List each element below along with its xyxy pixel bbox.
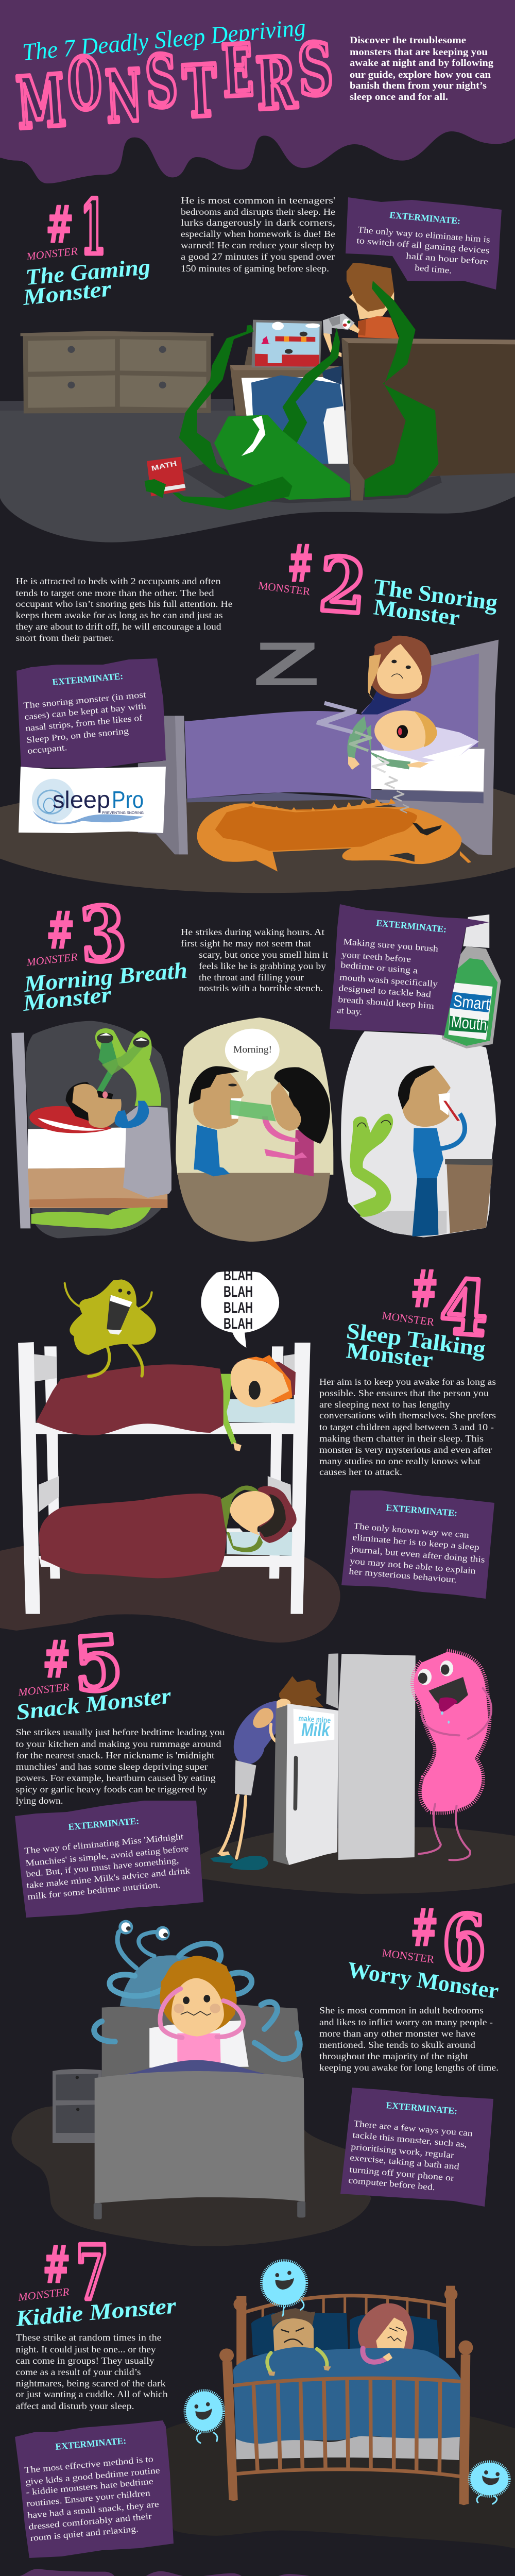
- callout: exterminate 2: [16, 658, 166, 768]
- text block: monster 7: [16, 2332, 168, 2411]
- bunk frame: [18, 1342, 311, 1614]
- callout panel: [340, 2088, 493, 2207]
- callout text: you may not be able to explain: [350, 1556, 476, 1576]
- text block: monster 4: [319, 1377, 496, 1477]
- callout text: - kiddie monsters hate bedtime: [26, 2476, 153, 2497]
- milk sticker: make mine: make mine: [298, 1714, 331, 1725]
- footboard: [341, 338, 515, 501]
- callout panel: [346, 197, 502, 290]
- text block: monster 4: many studies no one really knows what: [319, 1456, 480, 1466]
- logo card: [19, 767, 166, 833]
- speech text: [224, 1267, 253, 1332]
- text block: monster 2: tends to target one more than the other. The bed: [16, 588, 214, 598]
- mouthwash bottle: [442, 914, 501, 1048]
- man: [194, 1125, 220, 1171]
- text block: monster 7: nightmares, being scared of the dark: [16, 2378, 166, 2388]
- sleepPro logo card: [19, 767, 166, 833]
- panel: monster 4 illustration: [0, 1342, 340, 1642]
- text block: monster 5: powers. For example, heartburn caused by eating: [16, 1773, 216, 1783]
- lower blanket: [39, 1494, 227, 1578]
- floor: [11, 2106, 371, 2246]
- woman: [294, 1130, 314, 1176]
- callout text: The way of eliminating Miss 'Midnight: [24, 1832, 184, 1856]
- floor: [200, 1827, 515, 1894]
- monster label: MONSTER: [25, 245, 78, 263]
- numeral 4: 4: [438, 1263, 491, 1353]
- panel: monster 1 illustration: [0, 263, 515, 543]
- intro text: sleep once and for all.: [350, 92, 448, 103]
- snore letters: Z: [398, 802, 411, 816]
- desk: [230, 347, 341, 416]
- text block: monster 3: [181, 927, 328, 993]
- intro text: [350, 35, 494, 103]
- boy gaming: [323, 263, 399, 357]
- callout text: give kids a good bedtime routine: [25, 2465, 160, 2487]
- text block: monster 1: warned! He can reduce your sleep by: [181, 240, 335, 250]
- text block: monster 2: occupant who isn’t snoring gets his full attention. He: [16, 599, 233, 609]
- pink fuzzy monster: [414, 1652, 491, 1860]
- callout heading: EXTERMINATE:: [386, 2100, 458, 2116]
- callout panel: [15, 1801, 203, 1918]
- top blanket: [36, 1364, 224, 1435]
- name: Snack Monster: [15, 1683, 173, 1725]
- breath monsters: [95, 1028, 161, 1106]
- callout heading: EXTERMINATE:: [52, 671, 124, 687]
- heading: monster 3: [21, 889, 188, 1016]
- text block: monster 5: to your kitchen and making you rummage around: [16, 1739, 221, 1749]
- callout text: take make mine Milk's advice and drink: [26, 1866, 191, 1890]
- snore letters: Z: [312, 692, 363, 742]
- text block: monster 4: monster is very mysterious and even after: [319, 1445, 492, 1455]
- text block: monster 2: keeps them awake for as long as he can and just as: [16, 610, 223, 620]
- callout: exterminate 7: [15, 2420, 174, 2558]
- top bunk child: [219, 1355, 296, 1451]
- text block: monster 4: making them chatter in their sleep. This: [319, 1433, 484, 1444]
- heading: monster 5: [15, 1619, 173, 1725]
- text block: monster 5: [16, 1727, 225, 1806]
- callout heading: EXTERMINATE:: [389, 210, 461, 226]
- callout text: There are a few ways you can: [353, 2119, 473, 2138]
- sleeping man head: [66, 1082, 98, 1122]
- math book: [145, 457, 185, 498]
- text block: monster 3: the throat and filling your: [199, 972, 304, 982]
- worry creature: [94, 1920, 300, 2059]
- hash sign: #: [410, 1899, 438, 1958]
- callout text: to switch off all gaming devices: [356, 235, 490, 256]
- logo strapline: PREVENTING SNORING: [102, 810, 144, 815]
- callout text: breath should keep him: [338, 994, 435, 1011]
- heading: monster 1: 1: [80, 184, 106, 272]
- intro text: banish them from your night’s: [350, 80, 487, 91]
- title word: MONSTERS: R: [254, 40, 299, 126]
- speech text: Morning!: [233, 1044, 272, 1055]
- dresser: [21, 331, 214, 413]
- orange monster: [197, 799, 471, 872]
- heading: monster 1: [21, 184, 151, 310]
- milk sticker: milk: Milk: [301, 1719, 331, 1740]
- headboard: [102, 2003, 304, 2087]
- book title: MATH: [150, 459, 178, 472]
- bunk mattresses: [227, 1399, 295, 1423]
- gaming monster: [173, 281, 438, 510]
- callout text: bedtime or using a: [340, 960, 418, 976]
- text block: monster 3: first sight he may not seem that: [181, 938, 311, 948]
- mattress strip: [236, 2436, 460, 2460]
- title word: MONSTERS: S: [143, 39, 180, 124]
- text block: monster 7: These strike at random times in the: [16, 2332, 162, 2343]
- bottle brand: Mouth: Mouth: [450, 1012, 488, 1034]
- text block: monster 7: can come in groups! They usually: [16, 2355, 154, 2366]
- callout text: The snoring monster (in most: [23, 689, 147, 710]
- floor: [164, 2415, 515, 2549]
- heading: monster 6: [346, 1899, 501, 2004]
- text block: monster 2: He is attracted to beds with 2 occupants and often: [16, 576, 221, 586]
- hash sign: #: [287, 534, 314, 594]
- callout text: Munchies' is simple, avoid eating before: [25, 1843, 189, 1868]
- monster label: MONSTER: [381, 1309, 435, 1328]
- small bed: [242, 366, 348, 464]
- fridge body: [326, 1653, 416, 1860]
- monster label: MONSTER: [17, 2285, 70, 2303]
- floor: [0, 1546, 340, 1642]
- callout text: designed to tackle bad: [338, 983, 432, 999]
- footboard: [219, 2341, 473, 2505]
- intro text: Discover the troublesome: [350, 35, 466, 46]
- name line 2: Monster: [21, 981, 113, 1016]
- callout text: prioritising work, regular: [351, 2142, 455, 2160]
- kiddie monster right: [470, 2463, 508, 2504]
- callout text: dressed comfortably and their: [28, 2511, 152, 2532]
- text block: monster 6: keeping you awake for long lengths of time.: [319, 2062, 499, 2073]
- text block: monster 5: for the nearest snack. Her nickname is 'midnight: [16, 1750, 215, 1760]
- logo wordmark: sleep: [53, 786, 110, 813]
- text block: monster 2: they are about to drift off, he will encourage a loud: [16, 621, 221, 632]
- monster label: MONSTER: [17, 1681, 70, 1699]
- panel: monster 5 illustration: [200, 1652, 515, 1894]
- text block: monster 2: snort from their partner.: [16, 633, 114, 643]
- callout text: [23, 689, 147, 756]
- callout text: routines. Ensure your children: [26, 2488, 151, 2509]
- callout text: occupant.: [27, 742, 67, 756]
- panel: monster 3 illustrations: [11, 914, 501, 1242]
- hash sign: #: [46, 195, 74, 255]
- text block: monster 1: [181, 195, 335, 274]
- text block: monster 1: He is most common in teenagers': [181, 195, 335, 206]
- kiddie monster left: [186, 2392, 222, 2443]
- callout text: cases) can be kept at bay with: [24, 701, 147, 722]
- text block: monster 5: munchies' and has some sleep depriving super: [16, 1761, 208, 1772]
- name line 1: The Gaming: [25, 254, 151, 290]
- callout text: bed time.: [415, 263, 452, 276]
- scene: sleeping man: [11, 1021, 171, 1238]
- title word: MONSTERS: E: [220, 28, 255, 113]
- scene: morning breath couple: [176, 1018, 333, 1242]
- callout heading: EXTERMINATE:: [386, 1502, 458, 1518]
- snore letters: Z: [253, 630, 320, 699]
- callout: exterminate 6: [340, 2088, 493, 2207]
- callout text: room is quiet and relaxing.: [30, 2524, 139, 2543]
- callout panel: [16, 658, 166, 768]
- callout text: eliminate her is to keep a sleep: [352, 1532, 479, 1552]
- text block: monster 4: possible. She ensures that the person you: [319, 1388, 489, 1398]
- name line 2: Monster: [372, 594, 461, 631]
- scene: toothbrushing: [341, 1031, 496, 1238]
- title word: MONSTERS: T: [181, 48, 219, 134]
- panel: monster 7 illustration: [164, 2286, 515, 2549]
- panel: sleep talking monster: [65, 1271, 279, 1377]
- floor: [0, 411, 515, 543]
- text block: monster 6: more than any other monster we have: [319, 2028, 475, 2039]
- game screen: [252, 320, 322, 368]
- callout text: Making sure you brush: [343, 937, 439, 954]
- footer purple band: [0, 2569, 515, 2576]
- callout text: half an hour before: [406, 251, 489, 266]
- heading: monster 2: [258, 534, 499, 631]
- callout text: The most effective method is to: [24, 2454, 153, 2475]
- hash sign: #: [43, 2235, 71, 2295]
- logo swirl: [32, 779, 144, 824]
- callout text: her mysterious behaviour.: [349, 1566, 457, 1585]
- heading: monster 7: [14, 2229, 178, 2331]
- text block: monster 1: a good 27 minutes if you spend over: [181, 251, 335, 262]
- blanket: [184, 711, 371, 799]
- text block: monster 7: or just wanting a cuddle. All of which: [16, 2389, 168, 2399]
- speech bubble: [201, 1271, 279, 1348]
- bed post left: [138, 716, 188, 854]
- title word: MONSTERS: [14, 27, 335, 145]
- callout text: [24, 2454, 160, 2543]
- numeral 3: 3: [78, 889, 129, 980]
- numeral 7: 7: [76, 2229, 109, 2317]
- pillows: [251, 2313, 348, 2355]
- callout text: [24, 1832, 191, 1902]
- sleepPro logo card: Pro: [112, 786, 144, 813]
- snore letters: Z: [382, 772, 400, 792]
- speech text: BLAH: [224, 1267, 253, 1284]
- snore letters: Z: [346, 725, 376, 757]
- text block: monster 5: She strikes usually just before bedtime leading you: [16, 1727, 225, 1737]
- snore letters: Z: [391, 788, 406, 805]
- header drip background: [0, 0, 515, 183]
- speech bubble: [225, 1029, 280, 1072]
- floor: [0, 788, 515, 893]
- name: Kiddie Monster: [14, 2293, 178, 2331]
- headboard: [233, 2286, 457, 2365]
- callout text: The only known way we can: [353, 1521, 470, 1540]
- callout panel: [330, 904, 489, 1036]
- callout text: journal, but even after doing this: [350, 1544, 485, 1565]
- text block: monster 7: night. It could just be one... or they: [16, 2344, 156, 2354]
- woman in bed: [358, 2303, 414, 2352]
- text block: monster 5: lying down.: [16, 1795, 63, 1806]
- monster label: MONSTER: [258, 579, 311, 598]
- speech text: BLAH: [224, 1283, 253, 1300]
- intro text: awake at night and by following: [350, 58, 494, 69]
- bottle brand: Smart: Smart: [452, 991, 491, 1013]
- callout text: [348, 2119, 473, 2192]
- intro text: our guide, explore how you can: [350, 70, 491, 80]
- title word: MONSTERS: O: [65, 41, 105, 127]
- worried woman: [125, 1956, 268, 2075]
- yellow monster: [70, 1279, 156, 1355]
- text block: monster 1: 150 minutes of gaming before sleep.: [181, 263, 329, 274]
- callout text: milk for some bedtime nutrition.: [27, 1880, 161, 1902]
- text block: monster 2: [16, 576, 233, 643]
- callout text: [349, 1521, 485, 1585]
- callout heading: EXTERMINATE:: [68, 1816, 140, 1832]
- wife: [362, 636, 432, 715]
- callout text: mouth wash specifically: [339, 972, 438, 989]
- text block: monster 4: are sleeping next to has lengthy: [319, 1399, 450, 1410]
- callout: exterminate 1: [346, 197, 502, 290]
- text block: monster 4: to target children aged between 3 and 10 -: [319, 1422, 494, 1432]
- callout panel: [15, 2420, 174, 2558]
- callout text: The only way to eliminate him is: [357, 225, 490, 245]
- callout text: at bay.: [337, 1005, 363, 1017]
- text block: monster 3: scary, but once you smell him it: [199, 950, 328, 960]
- name: Worry Monster: [346, 1957, 501, 2004]
- callout text: your teeth before: [341, 950, 411, 964]
- monster label: MONSTER: [25, 951, 78, 969]
- headboard: [371, 640, 499, 855]
- lower child: [221, 1486, 297, 1552]
- text block: monster 3: nostrils with a horrible stench.: [199, 983, 323, 993]
- text block: monster 4: conversations with themselves. She prefers: [319, 1410, 496, 1420]
- fridge door: [273, 1704, 338, 1865]
- callout heading: EXTERMINATE:: [55, 2435, 127, 2452]
- callout text: nasal strips, from the likes of: [25, 713, 143, 733]
- text block: monster 1: especially when homework is due! Be: [181, 229, 335, 239]
- callout text: Sleep Pro, on the snoring: [26, 726, 129, 745]
- floor shadow: [182, 462, 442, 503]
- wall strip: [0, 399, 233, 411]
- callout: exterminate 4: [341, 1490, 494, 1599]
- title line: The 7 Deadly Sleep Depriving: The 7 Deadly Sleep Depriving: [21, 14, 307, 66]
- panel: top kiddie monster: [263, 2261, 306, 2316]
- callout text: tackle this monster, such as,: [352, 2130, 467, 2149]
- speech text: BLAH: [224, 1315, 253, 1332]
- husband: [347, 710, 479, 770]
- snore letters: Z: [369, 753, 392, 777]
- callout heading: EXTERMINATE:: [376, 918, 447, 935]
- callout: exterminate 5: [15, 1801, 203, 1918]
- text block: monster 4: causes her to attack.: [319, 1467, 402, 1477]
- callout text: [337, 937, 439, 1017]
- monster label: MONSTER: [381, 1946, 435, 1965]
- panel: monster 2 illustration: [0, 636, 515, 893]
- hash sign: #: [410, 1260, 438, 1319]
- speech text: BLAH: [224, 1299, 253, 1316]
- title word: MONSTERS: N: [104, 54, 144, 139]
- title: [14, 14, 335, 145]
- text block: monster 7: come as a result of your child’s: [16, 2367, 141, 2377]
- numeral 6: 6: [442, 1899, 486, 1987]
- nightstand: [53, 2069, 102, 2143]
- callout text: [356, 225, 490, 276]
- intro text: monsters that are keeping you: [350, 47, 488, 58]
- text block: monster 1: lurks dangerously in dark corners,: [181, 217, 335, 228]
- panel: monster 6 illustration: [11, 1920, 371, 2246]
- mattress: [370, 749, 485, 792]
- boy raiding fridge: [210, 1676, 323, 1870]
- quilt: [233, 2347, 461, 2445]
- callout text: turning off your phone or: [349, 2164, 455, 2183]
- text block: monster 4: Her aim is to keep you awake for as long as: [319, 1377, 496, 1387]
- hash sign: #: [46, 901, 75, 960]
- name line 2: Monster: [21, 276, 113, 310]
- callout text: have had a small snack, they are: [27, 2499, 159, 2520]
- title word: MONSTERS: M: [14, 58, 68, 145]
- text block: monster 6: [319, 2005, 499, 2073]
- snore letters: [253, 630, 411, 816]
- text block: monster 6: throughout the majority of the night: [319, 2051, 468, 2061]
- name line 1: Sleep Talking: [345, 1318, 487, 1362]
- bedding arms: [267, 2353, 271, 2372]
- hash sign: #: [43, 1630, 71, 1689]
- numeral 2: 2: [317, 540, 369, 631]
- heading: monster 4: [345, 1260, 491, 1372]
- text block: monster 1: bedrooms and disrupts their sleep. He: [181, 207, 335, 217]
- numeral 5: 5: [71, 1619, 125, 1709]
- text block: monster 6: and likes to inflict worry on many people -: [319, 2017, 493, 2027]
- callout text: exercise, taking a bath and: [350, 2153, 460, 2172]
- callout: exterminate 3: [330, 904, 489, 1036]
- text block: monster 6: mentioned. She tends to skulk around: [319, 2040, 475, 2050]
- text block: monster 5: spicy or garlic heavy foods can be triggered by: [16, 1784, 208, 1794]
- bed foot: [95, 2071, 305, 2204]
- callout text: computer before bed.: [348, 2175, 436, 2192]
- text block: monster 6: She is most common in adult bedrooms: [319, 2005, 484, 2015]
- callout text: bed. But, if you must have something,: [26, 1855, 179, 1879]
- text block: monster 7: affect and disturb your sleep.: [16, 2401, 134, 2411]
- green breath: [230, 1100, 276, 1122]
- callout panel: [341, 1490, 494, 1599]
- title word: MONSTERS: S: [296, 27, 335, 112]
- man in bed: [271, 2308, 315, 2351]
- name line 1: Morning Breath: [23, 957, 188, 997]
- text block: monster 3: feels like he is grabbing you by: [199, 961, 326, 971]
- text block: monster 3: He strikes during waking hours. At: [181, 927, 324, 937]
- name line 2: Monster: [345, 1337, 434, 1372]
- name line 1: The Snoring: [372, 574, 499, 616]
